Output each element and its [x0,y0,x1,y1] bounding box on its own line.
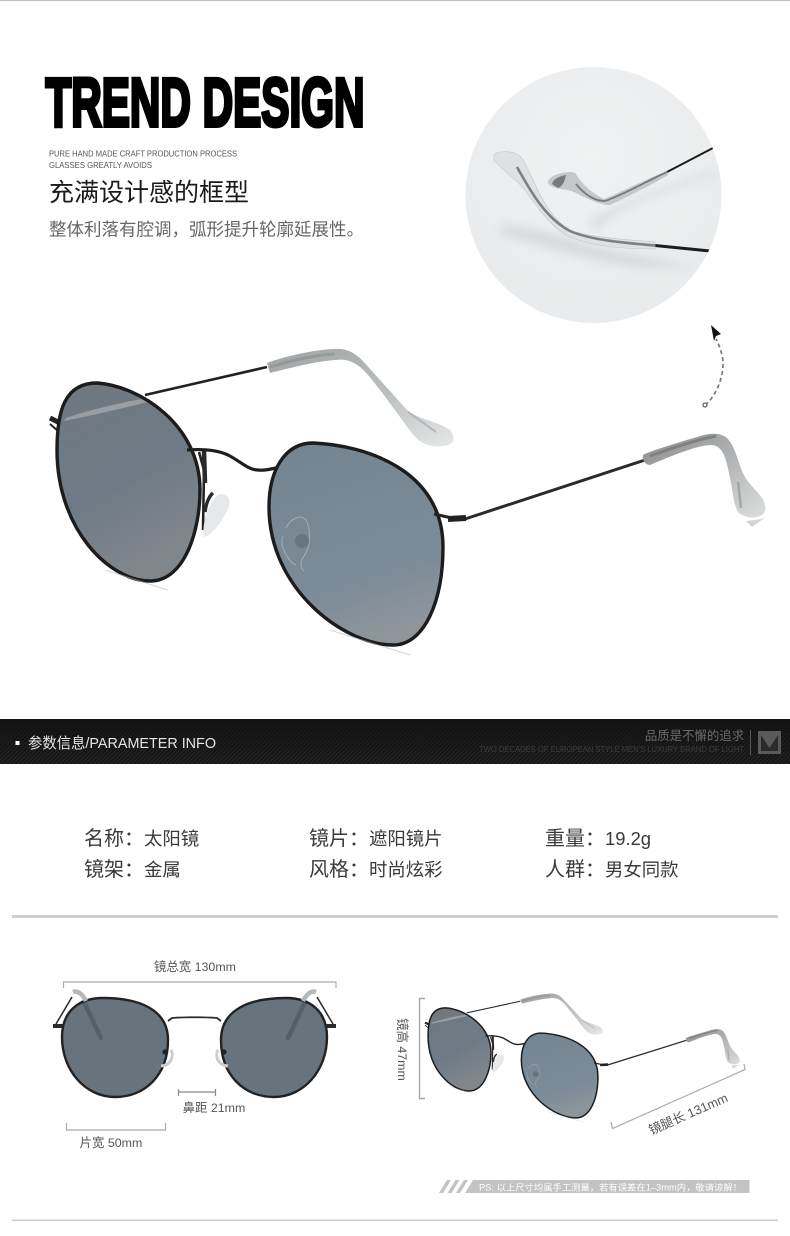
temple tip: lower [494,152,710,251]
title: TREND DESIGN: TREND DESIGN [46,64,364,141]
dimension diagram: front view [53,959,336,1150]
text block: English tagline: PURE HAND MADE CRAFT PRODUCTION PROCESS [49,150,237,158]
dimension: lens width [66,1123,166,1150]
heading: frame shape: 充满设计感的框型 [49,173,249,209]
section banner: parameter info: 品质是不懈的追求 [645,726,744,744]
top edge line [0,0,790,1]
side view sunglasses [425,994,740,1122]
dimension: temple length [611,1064,745,1138]
parameter list: 19.2g [605,828,651,849]
parameter list: 镜架： [84,858,144,881]
dimension: temple length: 镜腿长 131mm [646,1090,730,1138]
dimension: nose distance [178,1089,245,1115]
note: measurement disclaimer [439,1180,750,1193]
main product: round sunglasses [50,349,766,655]
note: measurement disclaimer: PS: 以上尺寸均属手工测量，若有误差在1–3mm内，敬请谅解！ [479,1182,742,1192]
dimension: nose distance: 鼻距 21mm [183,1100,245,1115]
dimension: lens height [395,998,425,1098]
dimension: total width: 镜总宽 130mm [154,959,236,974]
icon: brand logo [758,731,781,754]
parameter list: 太阳镜 [144,828,199,849]
parameter list [84,827,679,881]
section banner: parameter info: TWO DECADES OF EUROPEAN STYLE MEN'S LUXURY BRAND OF LIGHT [479,745,744,754]
section banner: parameter info: 参数信息/PARAMETER INFO [28,735,216,752]
text block: English tagline [49,150,237,170]
front view sunglasses [53,992,336,1097]
arrow: dashed curved arrow [703,325,723,407]
parameter list: 遮阳镜片 [369,828,443,849]
parameter list: 名称： [84,827,144,850]
parameter list: 金属 [144,859,181,880]
parameter list: 重量： [545,827,605,850]
dimension: lens width: 片宽 50mm [80,1135,142,1150]
text block: English tagline: GLASSES GREATLY AVOIDS [49,161,152,170]
dimension: total width [64,959,336,988]
dimension: lens height: 镜高 47mm [395,1018,410,1081]
parameter list: 风格： [309,858,369,881]
parameter list: 男女同款 [605,859,679,880]
section banner: parameter info [0,719,790,764]
parameter list: 时尚炫彩 [369,859,443,880]
text block: description: 整体利落有腔调，弧形提升轮廓延展性。 [49,216,364,242]
parameter list: 镜片： [309,827,369,850]
detail circle: temple tips close-up [466,67,722,323]
dimension diagram: side view [395,994,745,1138]
temple tip: upper [548,148,713,205]
parameter list: 人群： [545,858,605,881]
